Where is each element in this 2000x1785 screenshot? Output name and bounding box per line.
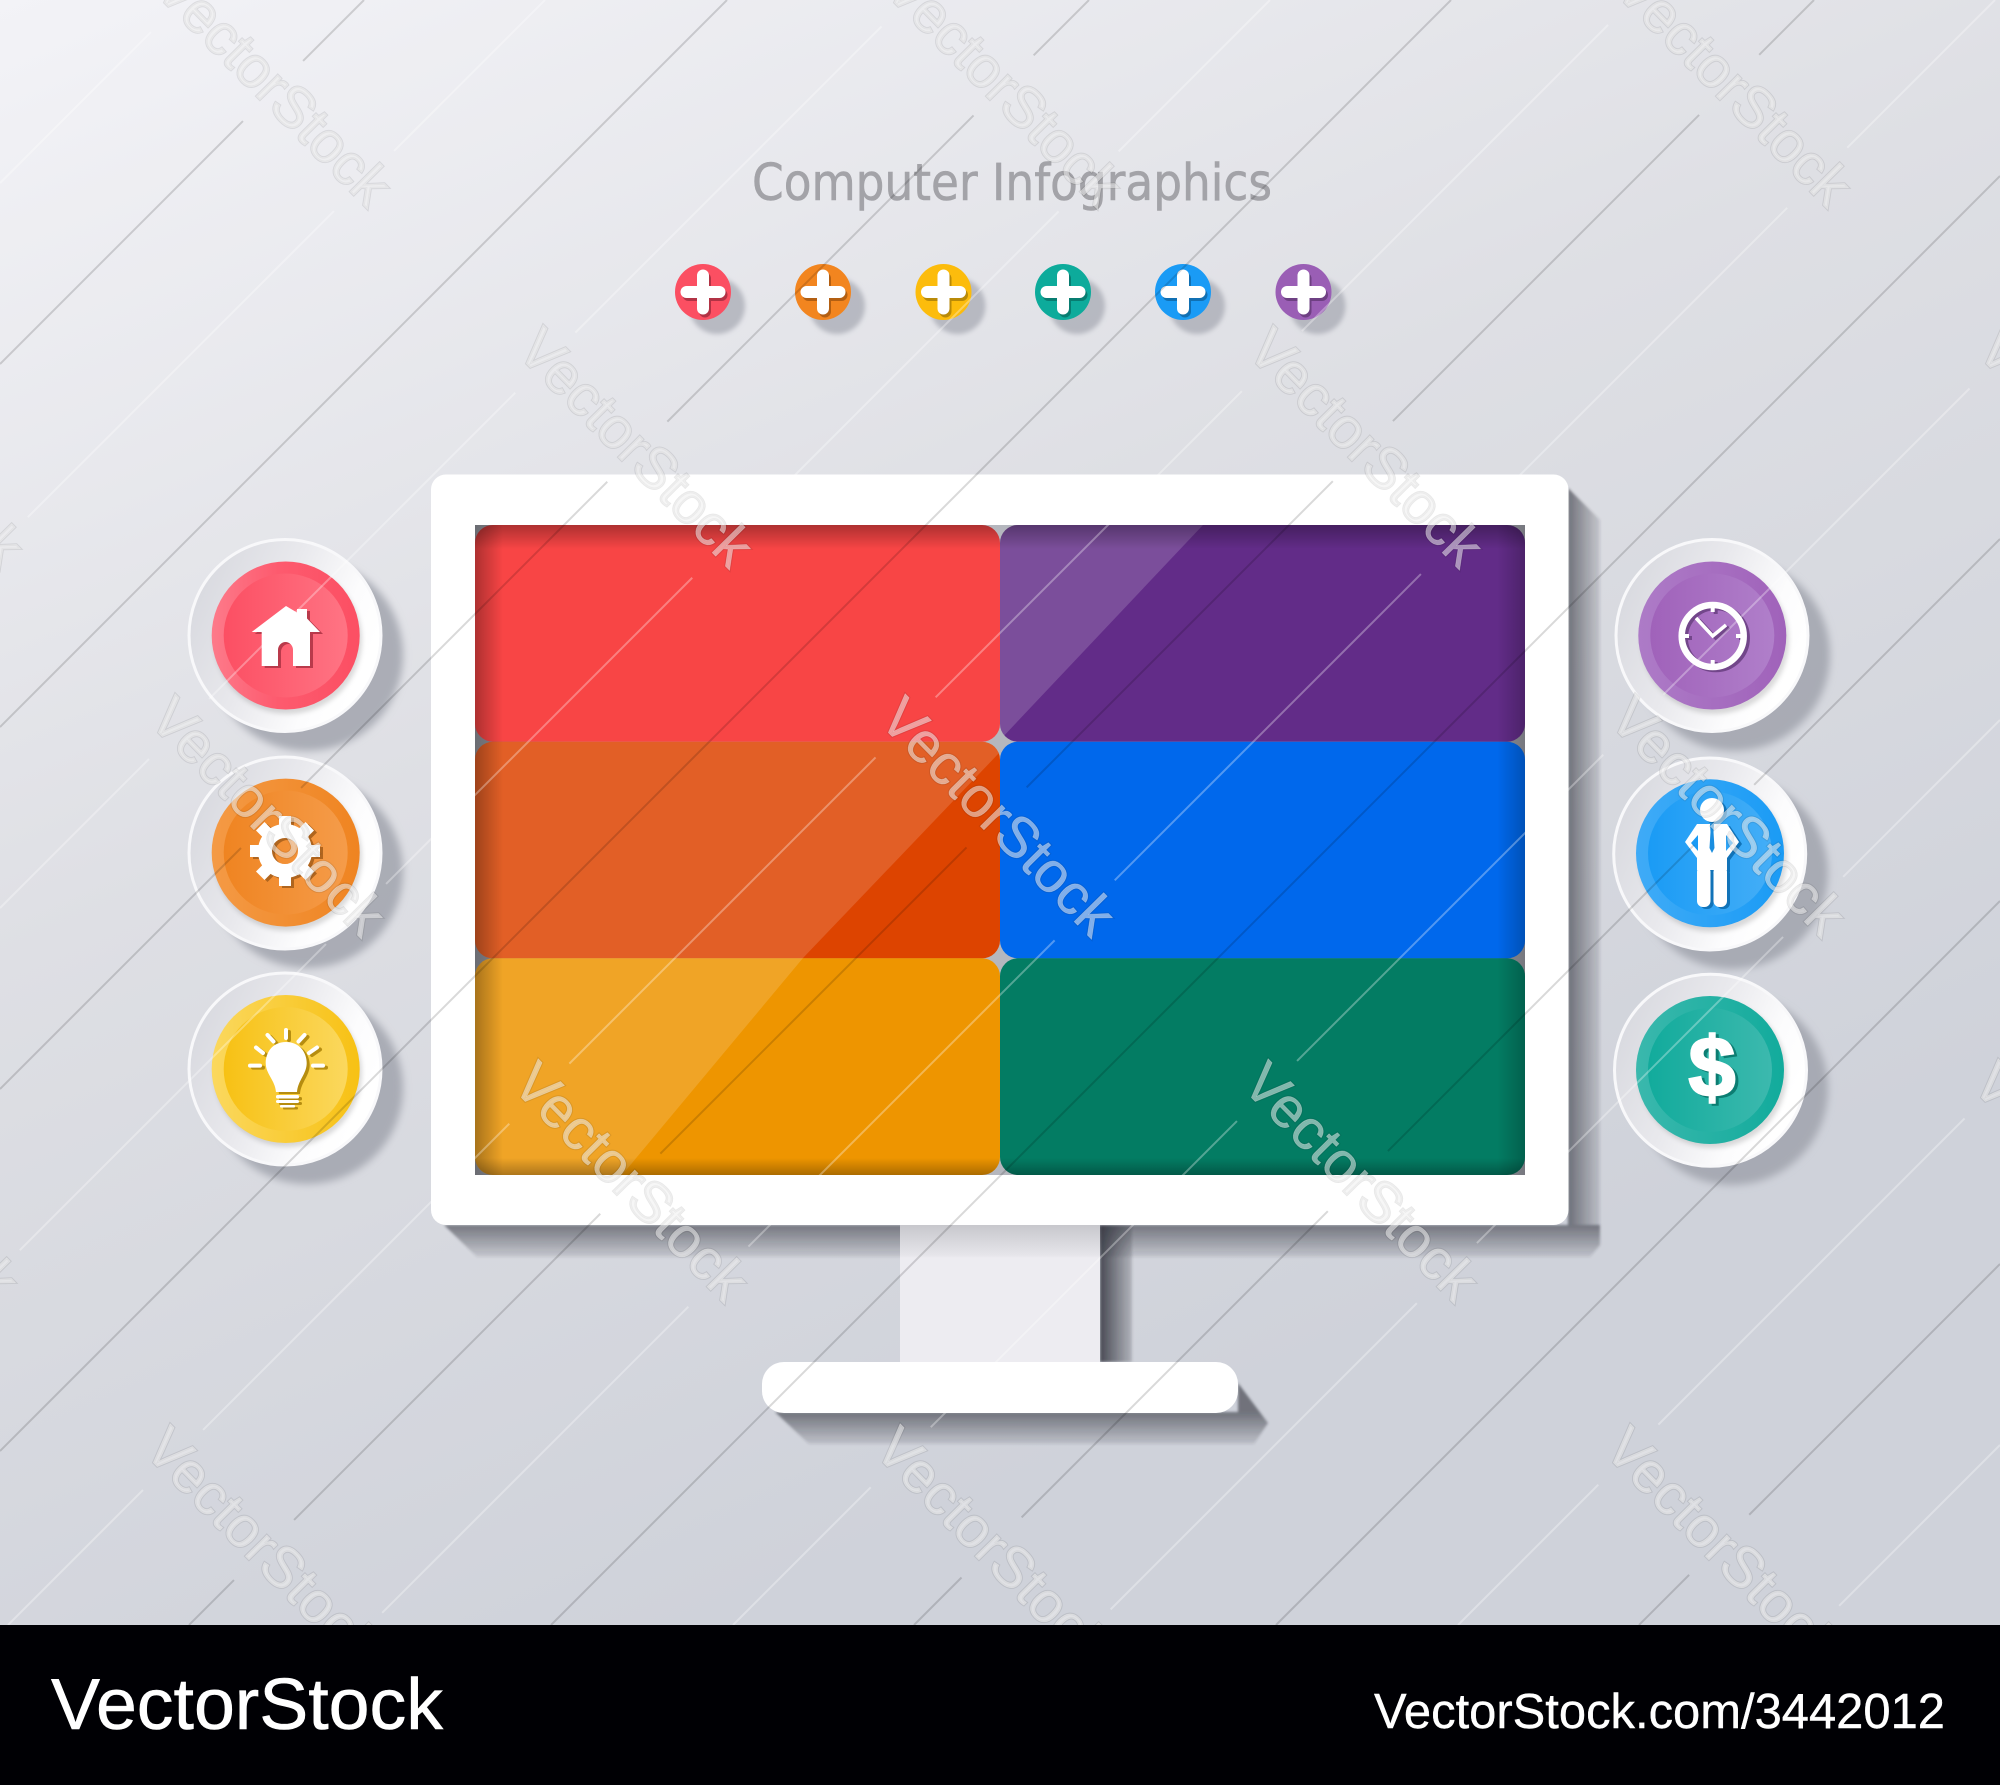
right icon column bbox=[1614, 540, 1830, 1185]
cell: green bbox=[1000, 958, 1525, 1175]
plus button: teal bbox=[1035, 264, 1105, 334]
button: settings bbox=[189, 757, 403, 968]
button: home bbox=[189, 540, 403, 751]
watermarks: VectorStock bbox=[863, 1415, 1123, 1679]
monitor frame bbox=[431, 474, 1568, 1225]
footer brand: VectorStock bbox=[51, 1665, 444, 1745]
plus button: purple bbox=[1276, 264, 1346, 334]
icon: dollar sign: $ bbox=[1689, 1020, 1735, 1114]
cell: purple bbox=[1000, 525, 1525, 742]
button: person bbox=[1614, 758, 1828, 969]
icon: gear bbox=[250, 816, 320, 886]
watermarks: VectorStock bbox=[863, 1415, 1123, 1679]
monitor base bbox=[762, 1362, 1238, 1413]
watermarks: VectorStock bbox=[506, 316, 766, 580]
watermarks: VectorStock bbox=[1593, 1415, 1853, 1679]
plus button: blue bbox=[1155, 264, 1225, 334]
icon: clock bbox=[1682, 605, 1744, 667]
watermarks: VectorStock bbox=[501, 1050, 761, 1314]
icon: person bbox=[1685, 798, 1739, 907]
watermarks: VectorStock bbox=[506, 316, 766, 580]
cell: orange bbox=[475, 742, 1000, 958]
monitor bbox=[431, 474, 1568, 1413]
plus button: yellow bbox=[916, 264, 986, 334]
icon: house bbox=[252, 606, 320, 666]
button: money bbox=[1614, 974, 1828, 1185]
watermarks: VectorStock bbox=[138, 685, 398, 949]
cell: blue bbox=[1000, 742, 1525, 958]
plus button: red bbox=[675, 264, 745, 334]
watermarks: VectorStock bbox=[868, 685, 1128, 949]
plus buttons row bbox=[675, 264, 1346, 334]
plus button: orange bbox=[795, 264, 865, 334]
footer image id: VectorStock.com/3442012 bbox=[1374, 1685, 1945, 1739]
footer bar bbox=[0, 1625, 2000, 1785]
watermarks: VectorStock bbox=[868, 685, 1128, 949]
screen cells bbox=[475, 525, 1525, 1175]
cell: yellow bbox=[475, 958, 1000, 1175]
button: time bbox=[1616, 540, 1830, 751]
cell: red bbox=[475, 525, 1000, 742]
watermarks: VectorStock bbox=[1236, 316, 1496, 580]
watermarks: VectorStock bbox=[1231, 1050, 1491, 1314]
button: idea bbox=[189, 973, 403, 1184]
icon: light bulb bbox=[250, 1030, 323, 1108]
title: Computer Infographics bbox=[752, 154, 1272, 213]
watermarks: VectorStock bbox=[1593, 1415, 1853, 1679]
watermarks: VectorStock bbox=[1598, 685, 1858, 949]
screen glare and edge shading bbox=[475, 525, 1525, 1175]
screen backing bbox=[475, 525, 1525, 1175]
watermarks: VectorStock bbox=[1598, 685, 1858, 949]
monitor shadow bbox=[444, 488, 1600, 1444]
monitor neck bbox=[900, 1225, 1100, 1362]
watermarks: VectorStock bbox=[138, 685, 398, 949]
watermarks: VectorStock bbox=[133, 1415, 393, 1679]
watermarks: VectorStock bbox=[1236, 316, 1496, 580]
watermarks: VectorStock bbox=[1231, 1050, 1491, 1314]
watermarks: VectorStock bbox=[501, 1050, 761, 1314]
watermarks: VectorStock bbox=[133, 1415, 393, 1679]
left icon column bbox=[189, 540, 403, 1184]
